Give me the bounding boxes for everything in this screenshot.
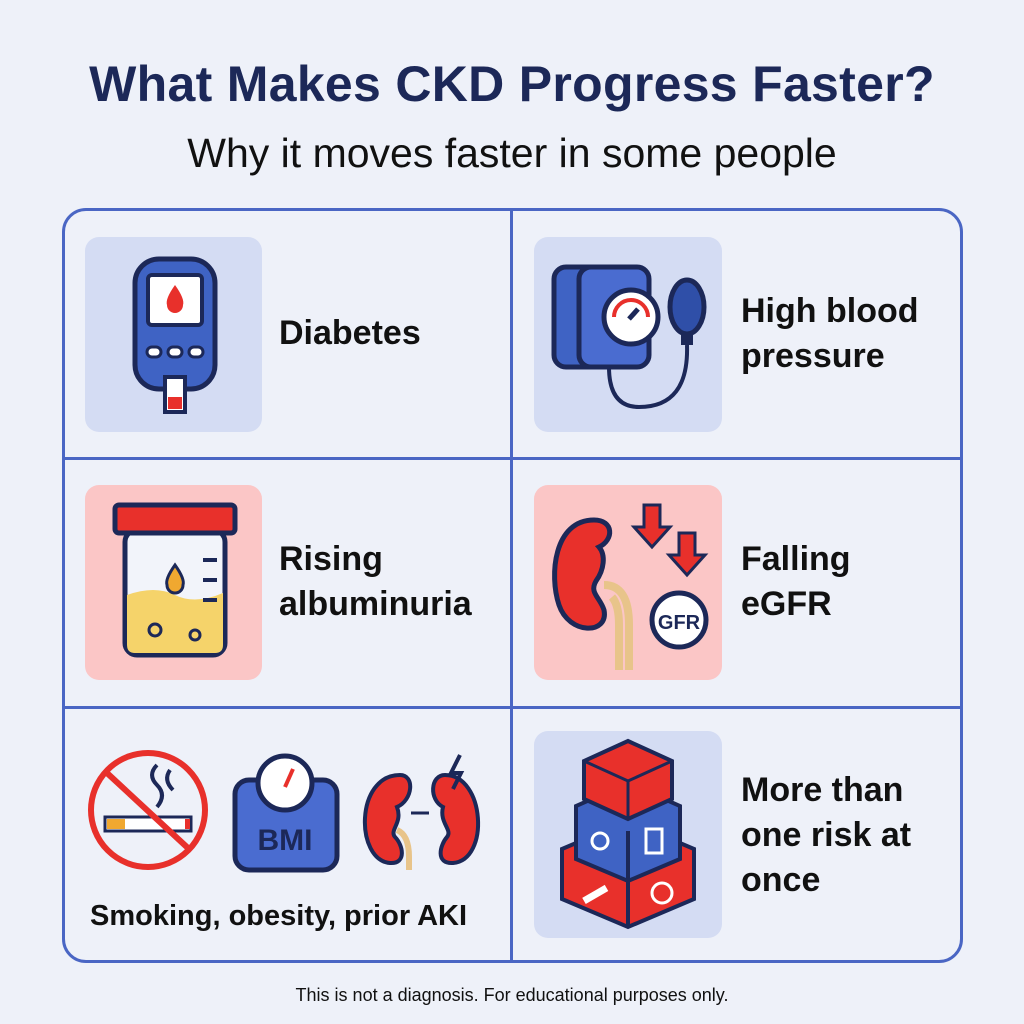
label: rising albuminuria bbox=[279, 540, 472, 623]
icons: smoking, BMI, AKI: BMI bbox=[258, 824, 312, 857]
icon: glucose meter bbox=[85, 237, 262, 432]
icon: stacked risk blocks bbox=[534, 731, 722, 938]
subtitle: Why it moves faster in some people bbox=[187, 130, 837, 176]
label: falling eGFR: Falling bbox=[741, 540, 851, 578]
label: more than one risk: one risk at bbox=[741, 816, 911, 854]
icon: urine sample bbox=[85, 485, 262, 680]
label: high blood pressure: High blood bbox=[741, 292, 919, 330]
icon: kidney with falling GFR: GFR bbox=[658, 612, 701, 634]
label: more than one risk: More than bbox=[741, 771, 903, 809]
label: more than one risk: once bbox=[741, 861, 820, 899]
label: diabetes: Diabetes bbox=[279, 314, 421, 352]
label: high blood pressure: pressure bbox=[741, 337, 885, 375]
label: rising albuminuria: Rising bbox=[279, 540, 383, 578]
icons: smoking, BMI, AKI bbox=[88, 750, 480, 872]
label: falling eGFR: eGFR bbox=[741, 585, 832, 623]
label: more than one risk bbox=[741, 771, 911, 899]
label: smoking, obesity, prior AKI: Smoking, obesity, prior AKI bbox=[90, 900, 467, 932]
icon: kidney with falling GFR bbox=[534, 485, 722, 680]
panel: risk grid bbox=[62, 208, 963, 963]
label: falling eGFR bbox=[741, 540, 851, 623]
title: What Makes CKD Progress Faster? bbox=[89, 56, 935, 112]
label: rising albuminuria: albuminuria bbox=[279, 585, 472, 623]
label: high blood pressure bbox=[741, 292, 919, 375]
footer disclaimer: This is not a diagnosis. For educational purposes only. bbox=[296, 985, 728, 1005]
icon: blood pressure cuff bbox=[534, 237, 722, 432]
